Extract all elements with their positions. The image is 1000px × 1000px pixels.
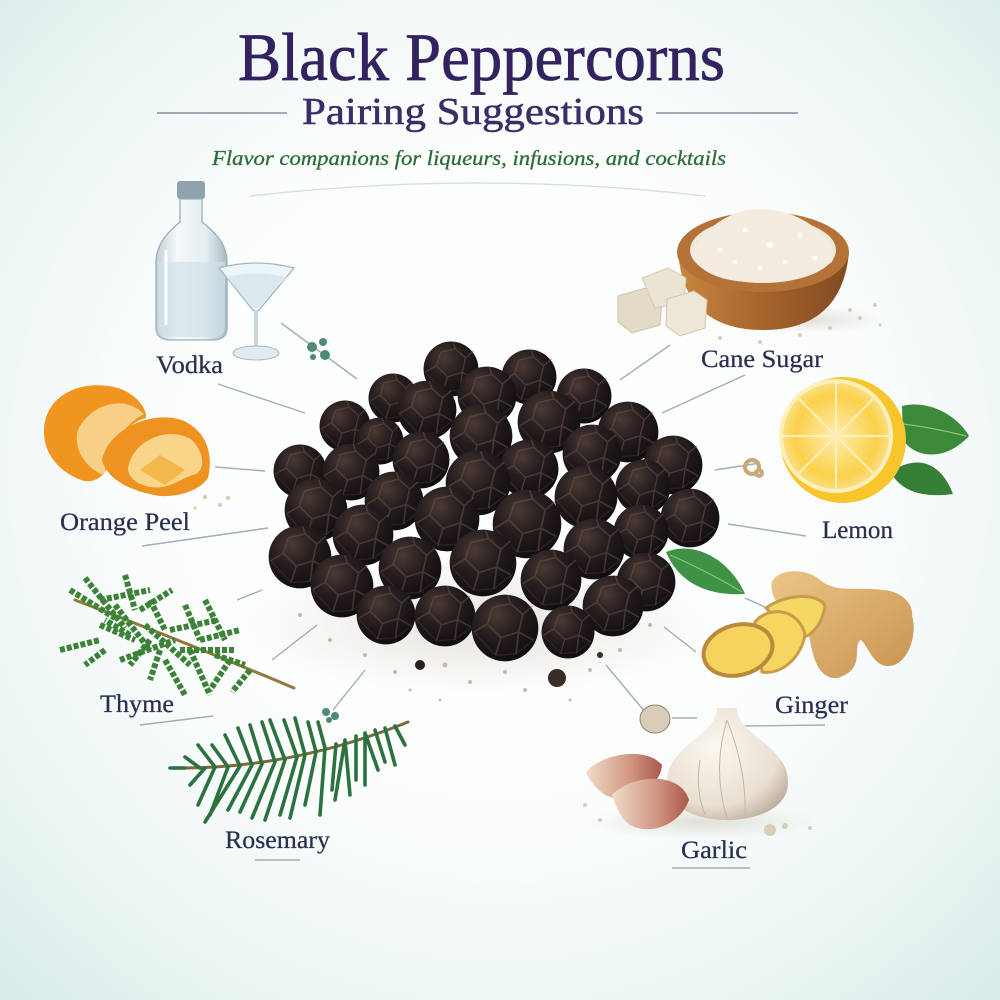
icon: lemon with leaves [780, 377, 969, 503]
tagline: Flavor companions for liqueurs, infusions, and cocktails [211, 146, 726, 170]
label: Vodka: Vodka [156, 352, 223, 379]
icon: small shell [640, 705, 670, 733]
label: Ginger: Ginger [775, 692, 849, 719]
label: Cane Sugar: Cane Sugar [701, 346, 824, 373]
icon: thyme sprig [60, 575, 294, 695]
icon: ginger [698, 571, 914, 683]
icon: sugar bowl with cubes [618, 209, 885, 344]
icon: vodka bottle and martini glass [156, 181, 294, 360]
subtitle: Pairing Suggestions [302, 91, 644, 133]
icon: small bead by lemon [745, 460, 762, 476]
label: Garlic: Garlic [681, 837, 747, 864]
label: Orange Peel: Orange Peel [60, 509, 190, 536]
icon: mint leaf [666, 548, 745, 594]
icon: dots by vodka [307, 338, 330, 360]
icon: orange peel [44, 385, 230, 510]
label: Thyme: Thyme [100, 691, 174, 718]
peppercorn pile [245, 342, 719, 702]
icon: rosemary sprig [170, 718, 408, 822]
title: Black Peppercorns [238, 19, 725, 95]
icon: garlic [580, 708, 820, 840]
label: Lemon: Lemon [822, 517, 893, 544]
label: Rosemary: Rosemary [225, 827, 331, 854]
connector lines [140, 323, 825, 868]
dots by rosemary [322, 708, 339, 723]
